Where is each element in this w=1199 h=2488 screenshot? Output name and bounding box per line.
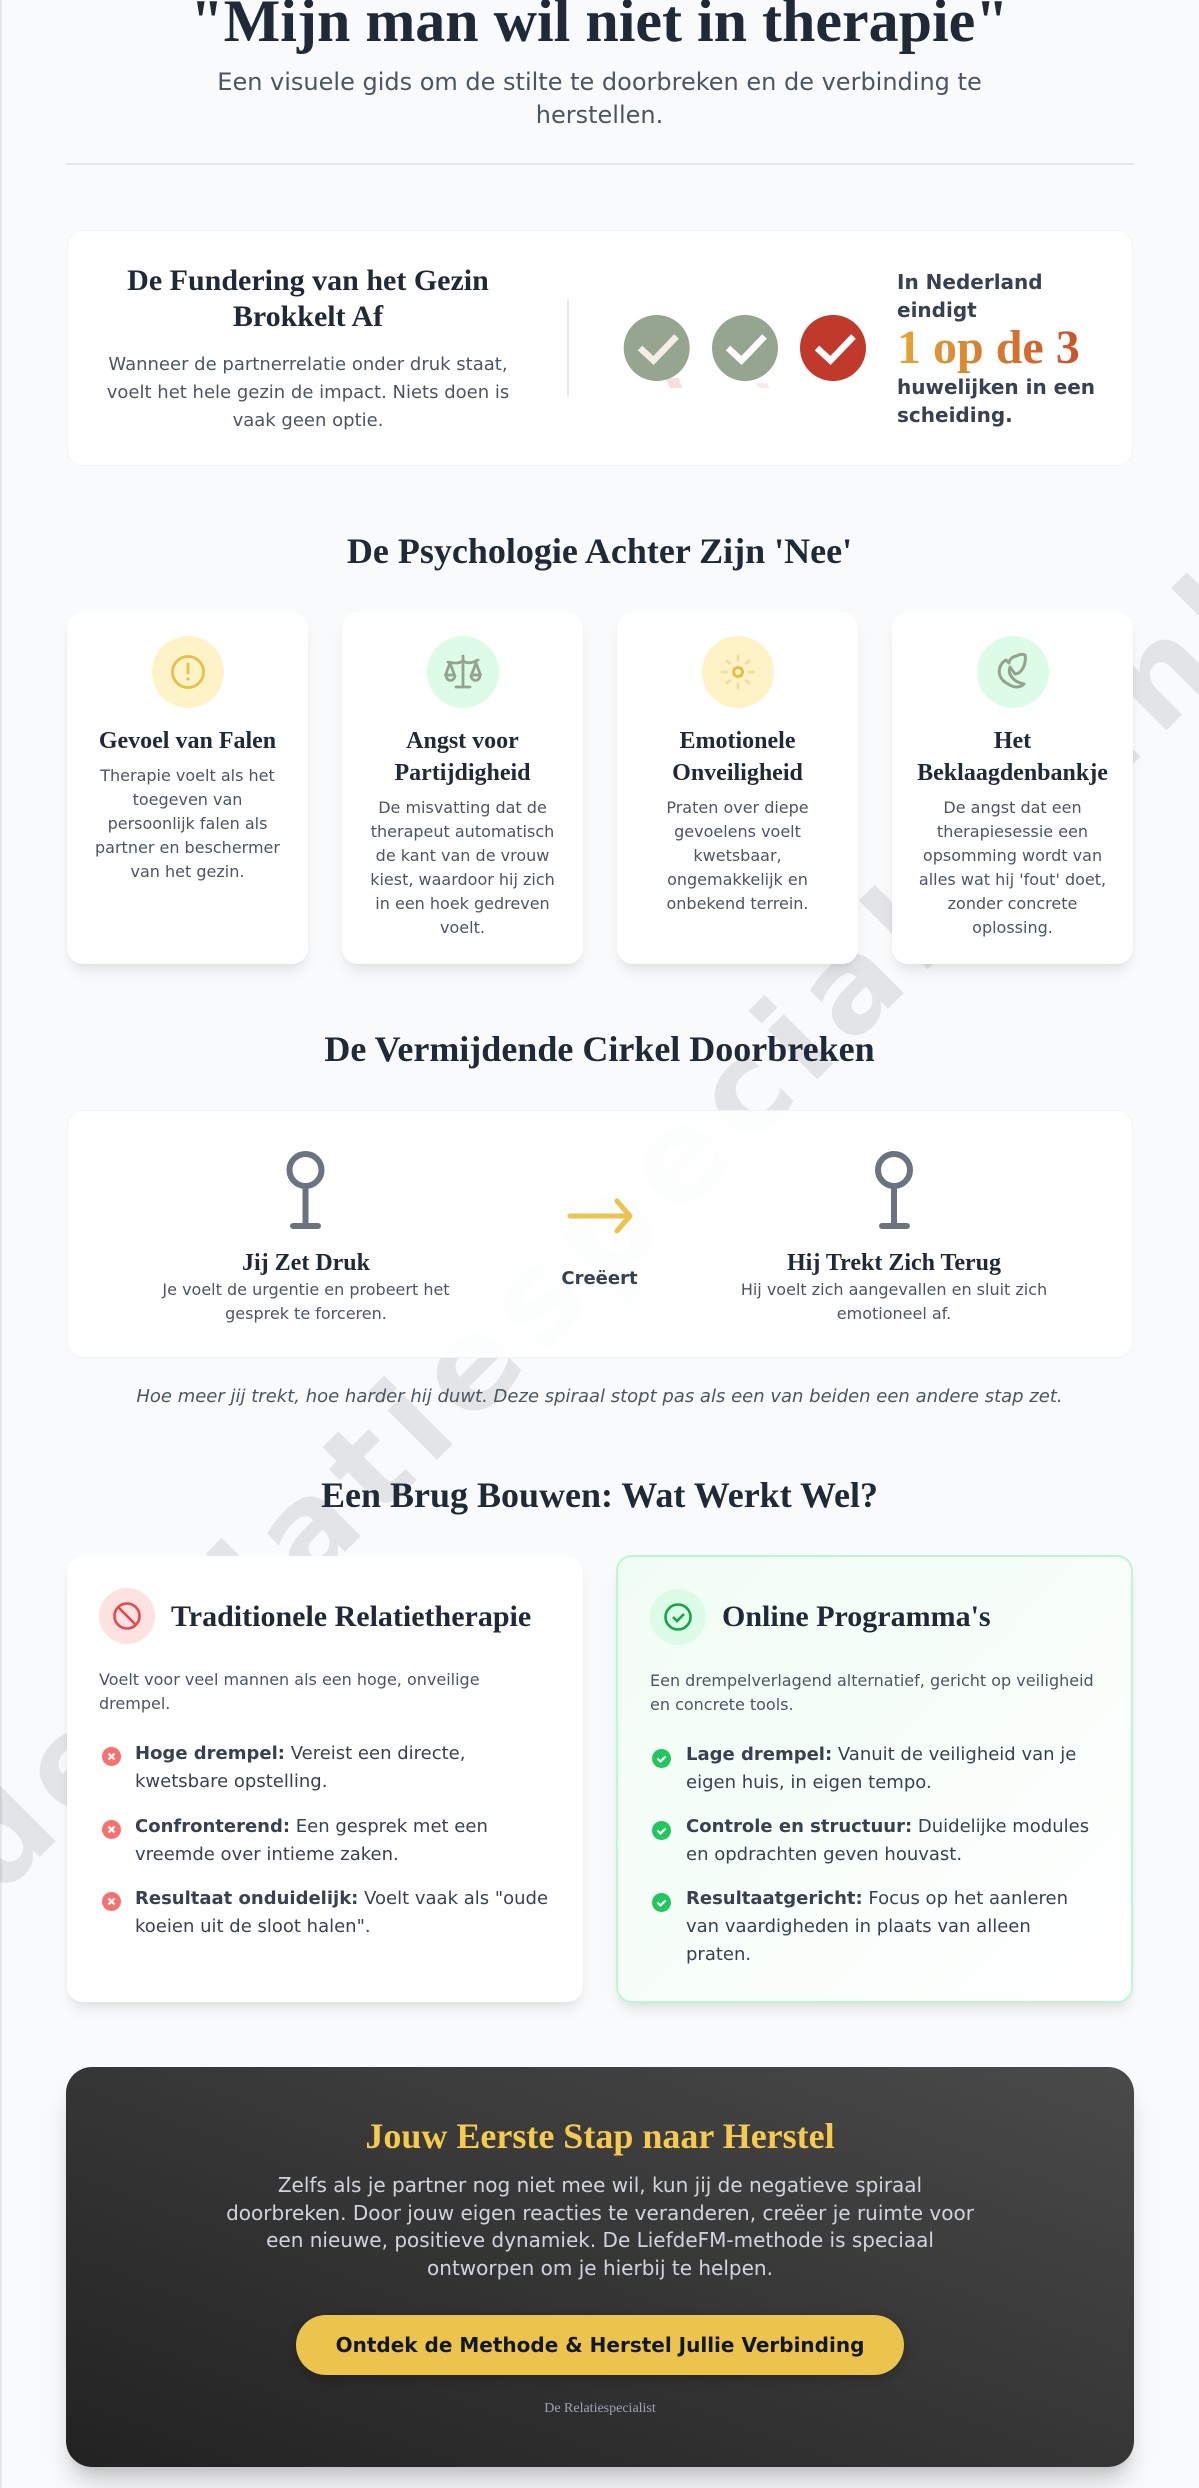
card text [95,766,280,881]
item text [686,1744,1076,1793]
cta button [296,2315,904,2375]
text: in nederland eindigt: In Nederland [897,270,1043,294]
icon: check [652,1821,671,1840]
item text: Lage drempel: Vanuit de veiligheid van je [686,1744,1076,1765]
item text [135,1743,465,1792]
step text: hij: emotioneel af. [837,1304,951,1323]
card title [394,728,530,786]
icon: prohibited [99,1588,155,1644]
heading: foundation: De Fundering van het Gezin [127,264,489,297]
step text: hij: Hij voelt zich aangevallen en sluit zich [741,1280,1047,1299]
panel: emotionele onveiligheid [617,612,858,964]
list item [652,1816,1089,1865]
card text: opsomming wordt van [923,846,1102,865]
icon: cross [102,1892,121,1911]
card title [917,728,1108,786]
card text: De misvatting dat de [378,798,547,817]
step text: jij: Je voelt de urgentie en probeert het [162,1280,450,1299]
heading: cycle: De Vermijdende Cirkel Doorbreken [324,1029,875,1069]
arrow label: Creëert [561,1268,638,1289]
item text: koeien uit de sloot halen". [135,1916,371,1937]
card text [919,798,1106,937]
panel: angst voor partijdigheid [342,612,583,964]
panel intro: Voelt voor veel mannen als een hoge, onveilige [99,1670,480,1689]
icon: person right [875,1151,913,1229]
step title: hij: Hij Trekt Zich Terug [787,1250,1001,1276]
subtitle: Een visuele gids om de stilte te doorbreken en de verbinding te [217,68,982,96]
card title: Gevoel van Falen [99,728,276,754]
panel: beklaagdenbankje [892,612,1133,964]
page edge line [0,0,2,2488]
item text: van vaardigheden in plaats van alleen [686,1916,1031,1937]
item text: vreemde over intieme zaken. [135,1844,399,1865]
icon: three check circles [624,315,866,388]
panel title: Traditionele Relatietherapie [171,1600,531,1633]
item text: Confronterend: Een gesprek met een [135,1816,488,1837]
card text: De angst dat een [943,798,1082,817]
card text [666,798,809,913]
card text: therapeut automatisch [371,822,554,841]
item text: en opdrachten geven houvast. [686,1844,962,1865]
heading: foundation: Brokkelt Af [233,300,383,333]
subtitle: herstellen. [536,101,663,129]
list item [102,1816,488,1865]
panel intro [650,1671,1094,1714]
step text: hij [741,1280,1047,1323]
cta button: Ontdek de Methode & Herstel Jullie Verbinding [336,2333,864,2357]
panel: cycle [67,1110,1133,1358]
list item [102,1888,548,1937]
panel: online programs [616,1555,1133,2003]
card title: Partijdigheid [394,760,530,786]
icon: warning [152,636,224,708]
text: huwelijken: scheiding. [897,403,1013,427]
step title: jij: Jij Zet Druk [242,1250,370,1276]
list item [652,1744,1076,1793]
card text: Praten over diepe [666,798,809,817]
panel intro: Een drempelverlagend alternatief, gericht op veiligheid [650,1671,1094,1690]
card text: zonder concrete [948,894,1077,913]
item text [686,1885,1068,1969]
item text: Controle en structuur: Duidelijke modules [686,1816,1089,1837]
subtitle [217,68,982,129]
panel title: Online Programma's [722,1600,991,1633]
header divider [66,163,1134,165]
text: in nederland eindigt [897,270,1043,322]
card text: toegeven van [133,790,242,809]
card text: alles wat hij 'fout' doet, [919,870,1106,889]
card text: onbekend terrein. [666,894,808,913]
item text: eigen huis, in eigen tempo. [686,1772,932,1793]
card text: in een hoek gedreven [375,894,550,913]
statistic divider [567,300,569,396]
card title [672,728,803,786]
item text [135,1888,548,1937]
card text: kiest, waardoor hij zich [370,870,555,889]
icon: check circle [650,1589,706,1645]
card text: partner en beschermer [95,838,280,857]
item text: kwetsbare opstelling. [135,1771,327,1792]
card text: therapiesessie een [937,822,1088,841]
icon: scales [427,636,499,708]
icon: cross [102,1747,121,1766]
panel: gevoel van falen [67,612,308,964]
card title: Onveiligheid [672,760,803,786]
text: foundation: Wanneer de partnerrelatie onder druk staat, [108,354,508,375]
panel: traditional therapy [67,1556,583,2002]
card text: gevoelens voelt [674,822,801,841]
card text: kwetsbaar, [693,846,782,865]
card title: Beklaagdenbankje [917,760,1108,786]
text: foundation: vaak geen optie. [233,410,383,431]
step text: jij [162,1280,450,1323]
icon: cross [102,1820,121,1839]
card text: oplossing. [972,918,1053,937]
icon: leaf [977,636,1049,708]
item text: praten. [686,1944,751,1965]
cta text: een nieuwe, positieve dynamiek. De LiefdeFM-methode is speciaal [266,2228,934,2252]
text: in nederland eindigt: eindigt [897,298,977,322]
cta text: ontworpen om je hierbij te helpen. [427,2256,773,2280]
panel: call to action [66,2067,1134,2467]
cta text: Zelfs als je partner nog niet mee wil, kun jij de negatieve spiraal [278,2173,922,2197]
panel intro [99,1670,480,1713]
spiral note: Hoe meer jij trekt, hoe harder hij duwt. Deze spiraal stopt pas als een van beiden een andere stap zet. [136,1386,1063,1407]
icon: sun [702,636,774,708]
brand: De Relatiespecialist [544,2401,656,2416]
panel intro: drempel. [99,1694,170,1713]
statistic number: 1 op de 3 [897,321,1080,374]
cta text [66,2172,1134,2283]
text: huwelijken [897,375,1095,427]
item text: Hoge drempel: Vereist een directe, [135,1743,465,1764]
text: huwelijken: huwelijken in een [897,375,1095,399]
card text: Therapie voelt als het [100,766,275,785]
icon: check [652,1749,671,1768]
item text: Resultaatgericht: Focus op het aanleren [686,1888,1068,1909]
card text: van het gezin. [131,862,244,881]
item text [686,1813,1089,1869]
card text: voelt. [440,918,485,937]
item text: Resultaat onduidelijk: Voelt vaak als "oude [135,1888,548,1909]
icon: person left [286,1151,324,1229]
card text: de kant van de vrouw [376,846,549,865]
text: foundation: voelt het hele gezin de impact. Niets doen is [107,382,509,403]
card title: Emotionele [680,728,795,754]
cta heading: Jouw Eerste Stap naar Herstel [365,2116,835,2156]
text: foundation [107,354,509,431]
arrow [568,1198,633,1234]
card text: persoonlijk falen als [108,814,267,833]
card text: ongemakkelijk en [667,870,808,889]
heading: psychology: De Psychologie Achter Zijn 'Nee' [347,531,852,571]
list item [650,1885,1120,1969]
cta text: doorbreken. Door jouw eigen reacties te veranderen, creëer je ruimte voor [226,2201,974,2225]
icon: check [652,1893,671,1912]
heading: bridge: Een Brug Bouwen: Wat Werkt Wel? [321,1475,878,1515]
card title: Het [994,728,1031,754]
card text [370,798,555,937]
card title: Angst voor [406,728,519,754]
list item [102,1743,465,1792]
heading: foundation [127,264,489,333]
step text: jij: gesprek te forceren. [225,1304,387,1323]
item text [135,1816,488,1865]
panel: statistic [67,230,1133,466]
panel intro: en concrete tools. [650,1695,794,1714]
